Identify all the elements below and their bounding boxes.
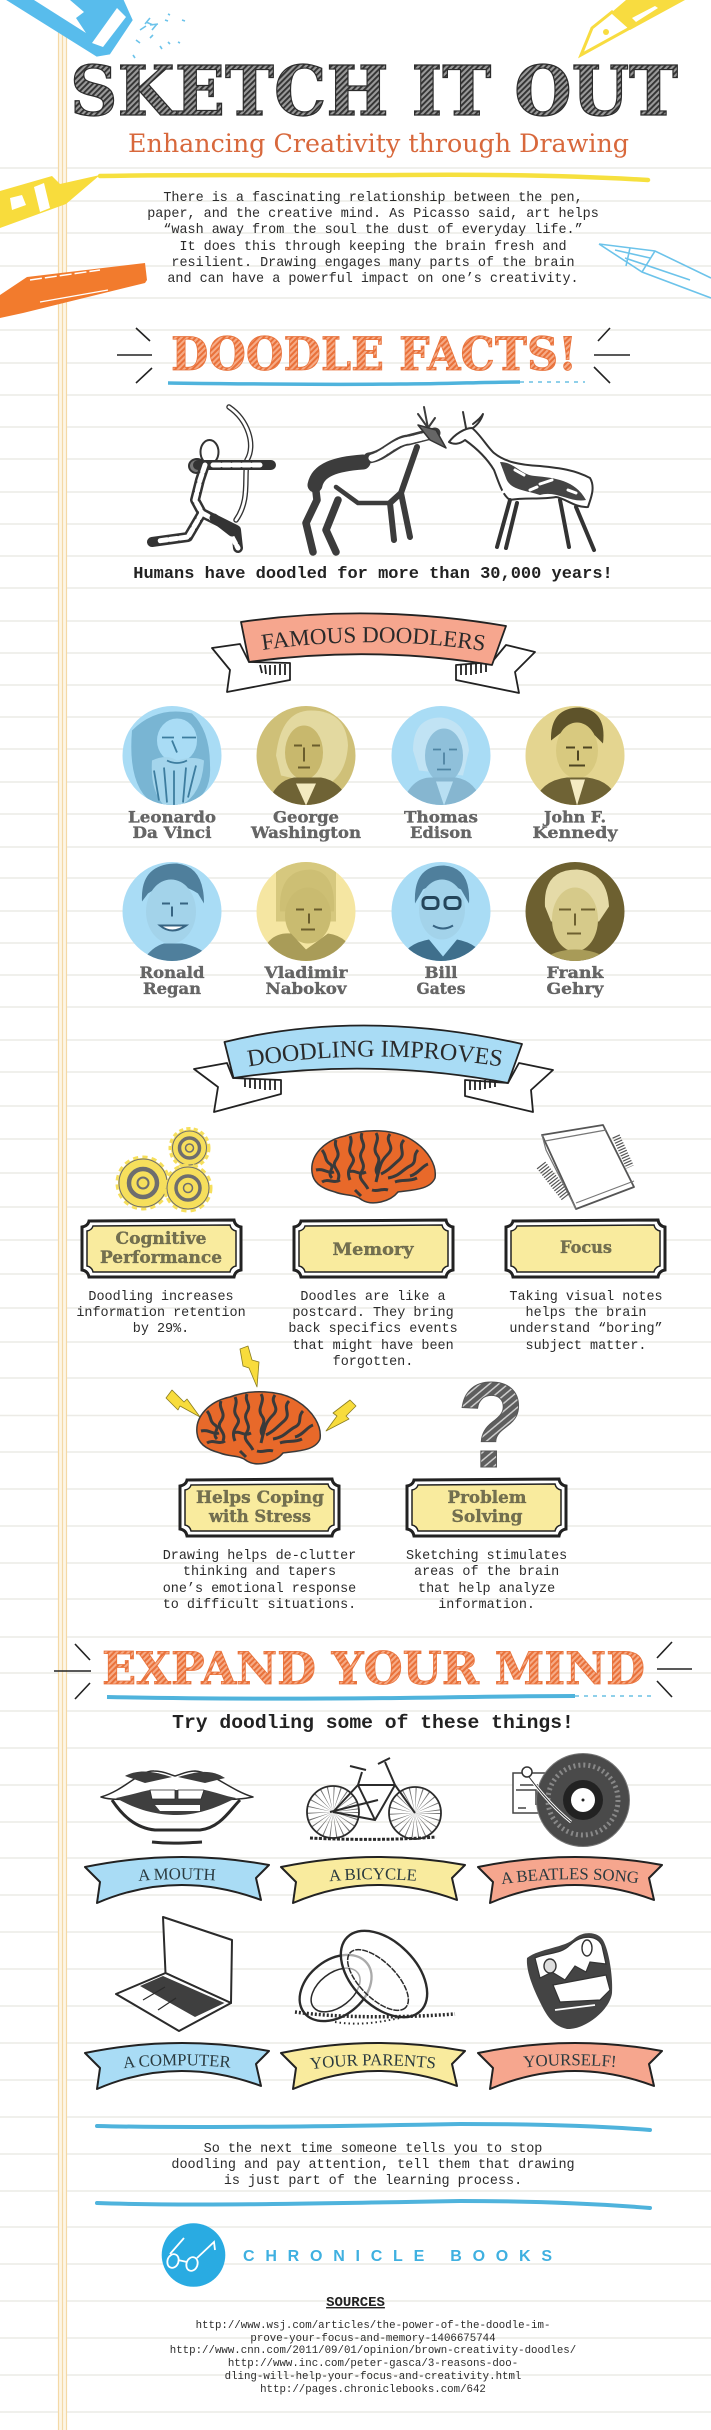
text: stress: thinking and tapers	[183, 1565, 336, 1580]
name: Ronald Regan: Ronald	[140, 963, 204, 982]
name: Frank Gehry: Frank	[546, 963, 604, 982]
illustration: cave deer one	[306, 407, 446, 552]
illustration: record player	[513, 1754, 630, 1846]
name: Vladimir Nabokov: Nabokov	[266, 979, 347, 998]
ribbon: a beatles song	[477, 1856, 663, 1904]
icon: brain	[312, 1131, 435, 1203]
name: Bill Gates: Gates	[416, 979, 466, 998]
text: focus: helps the brain	[526, 1306, 646, 1321]
heading: expand your mind: EXPAND YOUR MIND	[102, 1642, 645, 1695]
ribbon: a computer: A COMPUTER	[124, 2054, 230, 2068]
name: Ronald Regan: Regan	[143, 979, 201, 998]
title: SKETCH IT OUT	[70, 52, 678, 132]
label: focus: Focus	[560, 1238, 612, 1258]
sources: http://www.inc.com/peter-gasca/3-reasons-doo-	[228, 2358, 518, 2370]
icon: brain with stress	[197, 1392, 320, 1464]
illustration: cave deer two	[449, 412, 594, 550]
name: Thomas Edison	[404, 808, 478, 842]
closing text with blue rules: doodling and pay attention, tell them that drawing	[171, 2158, 575, 2173]
text: cognitive performance: by 29%.	[133, 1322, 189, 1337]
text: stress	[163, 1549, 356, 1613]
ribbon: yourself: YOURSELF!	[523, 2054, 615, 2068]
text: problem solving: Sketching stimulates	[406, 1549, 567, 1564]
portrait: Bill Gates	[391, 862, 491, 962]
name: George Washington: Washington	[250, 823, 361, 842]
closing text with blue rules: is just part of the learning process.	[224, 2174, 522, 2189]
name: George Washington	[250, 808, 361, 842]
sources	[170, 2295, 576, 2396]
icon: blue pencil	[599, 244, 711, 298]
text: problem solving	[406, 1549, 567, 1613]
subtitle: Enhancing Creativity through Drawing	[128, 129, 629, 158]
name: Thomas Edison: Edison	[410, 823, 472, 842]
ribbon: a mouth	[84, 1856, 270, 1904]
name: Vladimir Nabokov: Vladimir	[263, 963, 348, 982]
illustration: laptop	[116, 1917, 232, 2031]
ribbon: your parents	[280, 2042, 466, 2090]
text: cognitive performance: information retention	[76, 1306, 246, 1321]
label: helps coping with stress: with Stress	[208, 1507, 311, 1527]
text: focus: Taking visual notes	[509, 1290, 663, 1305]
ribbon: a beatles song: A BEATLES SONG	[502, 1868, 638, 1884]
portrait: George Washington	[256, 706, 356, 806]
text: cognitive performance: Doodling increases	[88, 1290, 234, 1305]
ribbon: a computer	[84, 2042, 270, 2090]
icon: blue eraser	[9, 0, 185, 58]
label: memory: Memory	[332, 1240, 415, 1260]
logo: chronicle books	[162, 2223, 552, 2287]
label: helps coping with stress: Helps Coping	[196, 1488, 324, 1508]
text: stress: one’s emotional response	[163, 1582, 356, 1597]
label: helps coping with stress	[180, 1479, 339, 1536]
portrait: Thomas Edison	[391, 706, 491, 806]
intro text	[147, 191, 599, 287]
name: Frank Gehry: Gehry	[546, 979, 604, 998]
label: problem solving: Problem	[448, 1488, 527, 1508]
text: memory: postcard. They bring	[292, 1306, 454, 1321]
text: stress: to difficult situations.	[163, 1598, 356, 1613]
sources: http://www.wsj.com/articles/the-power-of-the-doodle-im-	[196, 2320, 550, 2332]
logo: chronicle books: CHRONICLE BOOKS	[243, 2248, 552, 2265]
icon: orange marker	[0, 263, 147, 318]
text: problem solving: that help analyze	[418, 1582, 555, 1597]
label: cognitive performance	[82, 1220, 241, 1277]
sources: http://pages.chroniclebooks.com/642	[260, 2384, 486, 2396]
text: focus: subject matter.	[526, 1339, 646, 1354]
illustration: mouth	[101, 1771, 253, 1843]
closing text with blue rules: So the next time someone tells you to stop	[204, 2142, 542, 2157]
banner: doodling improves	[193, 1024, 554, 1113]
subheading: try doodling: Try doodling some of these things!	[172, 1712, 574, 1734]
closing text with blue rules	[97, 2124, 650, 2208]
intro text: and can have a powerful impact on one’s creativity.	[167, 272, 579, 287]
name: John F. Kennedy: John F.	[542, 808, 606, 826]
label: focus	[506, 1220, 665, 1277]
intro text: “wash away from the soul the dust of everyday life.”	[163, 223, 583, 238]
label: problem solving: Solving	[452, 1507, 523, 1527]
sources: dling-will-help-your-focus-and-creativity.html	[225, 2371, 521, 2383]
icon: lightning bolts	[166, 1346, 356, 1431]
portrait: John F. Kennedy	[525, 706, 625, 806]
text: cognitive performance	[76, 1290, 246, 1337]
banner: doodling improves: DOODLING IMPROVES	[246, 1040, 502, 1066]
text: memory: back specifics events	[288, 1322, 458, 1337]
name: George Washington: George	[273, 808, 339, 826]
name: Thomas Edison: Thomas	[404, 808, 478, 826]
text: problem solving: areas of the brain	[414, 1565, 559, 1580]
text: focus	[509, 1290, 663, 1354]
name: John F. Kennedy: Kennedy	[532, 823, 618, 842]
ribbon: a bicycle: A BICYCLE	[330, 1868, 416, 1882]
name: John F. Kennedy	[532, 808, 618, 842]
name: Bill Gates: Bill	[424, 963, 458, 982]
icon: gears	[118, 1130, 210, 1210]
label: memory	[294, 1220, 453, 1277]
text: memory: that might have been	[292, 1339, 454, 1354]
illustration: pointing hand	[527, 1933, 612, 2029]
name: Leonardo Da Vinci	[128, 808, 216, 842]
portrait: Leonardo da Vinci	[122, 706, 222, 806]
name: Leonardo Da Vinci: Da Vinci	[132, 823, 212, 842]
illustration: cave archer	[152, 407, 271, 548]
name: Ronald Regan	[140, 963, 204, 998]
illustration: bicycle	[307, 1758, 441, 1839]
text: problem solving: information.	[438, 1598, 535, 1613]
intro text: paper, and the creative mind. As Picasso said, art helps	[147, 207, 599, 222]
ribbon: your parents: YOUR PARENTS	[310, 2054, 435, 2069]
caption: humans have doodled: Humans have doodled for more than 30,000 years!	[133, 565, 613, 584]
name: Bill Gates	[416, 963, 466, 998]
sources: SOURCES	[326, 2295, 385, 2311]
text: stress: Drawing helps de-clutter	[163, 1549, 356, 1564]
ribbon: yourself	[477, 2042, 663, 2090]
label: cognitive performance: Performance	[100, 1248, 222, 1268]
heading: doodle facts: DOODLE FACTS!	[171, 327, 577, 381]
sources: prove-your-focus-and-memory-1406675744	[250, 2333, 496, 2345]
illustration: wedding rings	[287, 1915, 455, 2035]
text: memory: Doodles are like a	[300, 1290, 446, 1305]
icon: question mark: ?	[457, 1357, 525, 1493]
icon: yellow crayon with line	[0, 175, 648, 228]
banner: famous doodlers: FAMOUS DOODLERS	[261, 627, 484, 650]
text: memory	[288, 1290, 458, 1370]
icon: notepad	[541, 1125, 634, 1209]
intro text: resilient. Drawing engages many parts of the brain	[171, 256, 575, 271]
portrait: Frank Gehry	[525, 862, 625, 962]
intro text: There is a fascinating relationship between the pen,	[163, 191, 583, 206]
portrait: Vladimir Nabokov	[256, 862, 356, 962]
text: focus: understand “boring”	[509, 1322, 663, 1337]
ribbon: a mouth: A MOUTH	[138, 1868, 216, 1881]
name: Frank Gehry	[546, 963, 604, 998]
sources: http://www.cnn.com/2011/09/01/opinion/brown-creativity-doodles/	[170, 2345, 576, 2357]
label: problem solving	[407, 1479, 566, 1536]
intro text: It does this through keeping the brain fresh and	[179, 240, 567, 255]
banner: famous doodlers	[211, 612, 536, 694]
name: Leonardo Da Vinci: Leonardo	[128, 808, 216, 826]
ribbon: a bicycle	[280, 1856, 466, 1904]
icon: yellow fountain pen	[581, 0, 685, 55]
portrait: Ronald Regan	[122, 862, 222, 962]
label: cognitive performance: Cognitive	[116, 1229, 207, 1249]
text: memory: forgotten.	[333, 1355, 413, 1370]
name: Vladimir Nabokov	[263, 963, 348, 998]
